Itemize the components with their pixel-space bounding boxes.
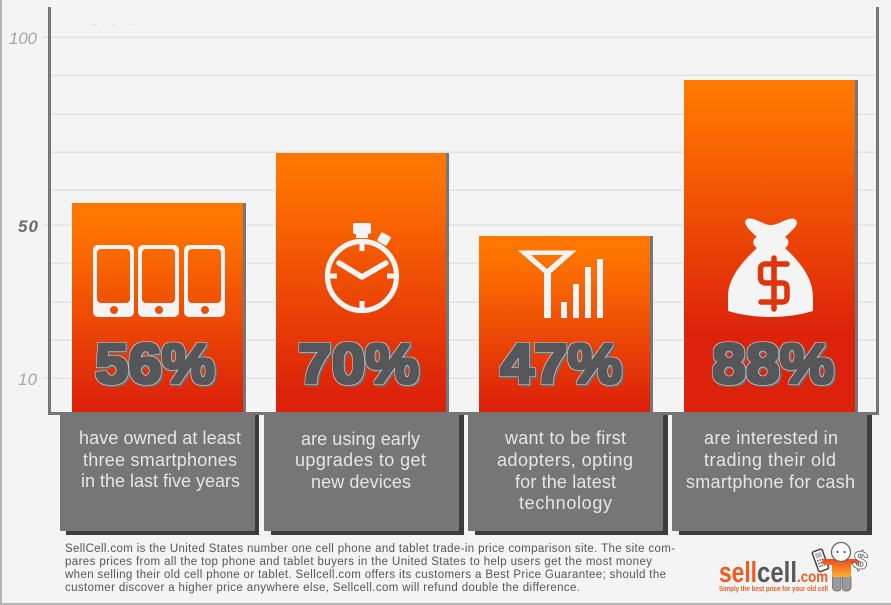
icon: antenna signal [518, 250, 603, 318]
value 47%: 47% [500, 332, 622, 396]
logo dollar sign: $ [850, 544, 871, 576]
caption: early upgrades [264, 415, 464, 535]
logo tagline: Simply the best price for your old cell [719, 584, 828, 593]
caption: early upgrades: are using early [301, 429, 420, 449]
axis label 10: 10 [18, 370, 38, 389]
bar: 47% [479, 236, 653, 412]
caption: first adopters: want to be first [504, 428, 626, 448]
axis label 50: 50 [18, 217, 39, 236]
chart frame [48, 7, 879, 415]
caption: trading for cash: smartphone for cash [686, 472, 855, 492]
icon: stopwatch [328, 223, 396, 310]
logo wordmark [719, 557, 828, 589]
caption: have owned: have owned at least [79, 428, 241, 448]
logo wordmark: cell [757, 557, 797, 589]
caption: early upgrades: new devices [311, 472, 411, 492]
caption: have owned: three smartphones [83, 450, 237, 470]
description paragraph: pares prices from all the top phone and tablet buyers in the United States to help users get the most money [65, 556, 652, 568]
caption: trading for cash: are interested in [704, 428, 838, 448]
caption: first adopters: for the latest [515, 472, 616, 492]
icon: three smartphones [93, 245, 225, 317]
bar: 70% [276, 153, 449, 412]
gridlines [43, 24, 876, 379]
caption: trading for cash: trading their old [704, 450, 836, 470]
axis label 100: 100 [9, 29, 38, 48]
bar: 88% [684, 80, 858, 412]
description paragraph [64, 543, 675, 594]
icon: money bag [728, 218, 813, 317]
caption: have owned [60, 415, 259, 535]
description paragraph: when selling their old cell phone or tablet. Sellcell.com offers its customers a Best Price Guarantee; should the [64, 569, 666, 581]
caption: trading for cash [672, 415, 872, 535]
caption: first adopters [468, 415, 668, 535]
description paragraph: SellCell.com is the United States number one cell phone and tablet trade-in price comparison site. The site com- [65, 543, 675, 555]
logo wordmark: sell [719, 557, 757, 589]
caption: first adopters: technology [519, 493, 612, 513]
bar: 56% [72, 203, 246, 412]
description paragraph: customer discover a higher price anywhere else, Sellcell.com will refund double the difference. [65, 582, 580, 594]
caption: have owned: in the last five years [81, 471, 240, 491]
caption: early upgrades: upgrades to get [295, 450, 426, 470]
y-axis labels [9, 29, 39, 389]
caption: first adopters: adopters, opting [497, 450, 633, 470]
value 88%: 88% [712, 332, 834, 396]
logo mascot [812, 542, 871, 591]
logo wordmark: .com [797, 569, 828, 586]
logo: sellcell.com [719, 542, 871, 593]
value 70%: 70% [298, 332, 419, 396]
value 56%: 56% [95, 332, 215, 396]
